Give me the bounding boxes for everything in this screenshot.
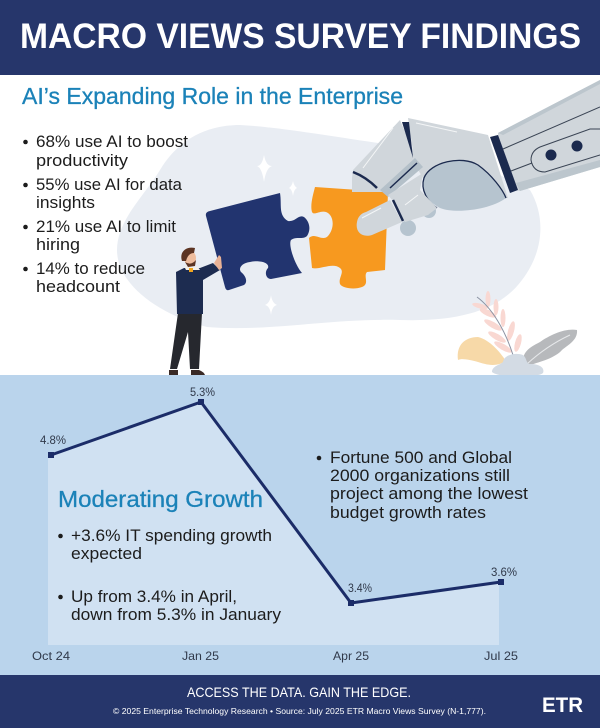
tagline: ACCESS THE DATA. GAIN THE EDGE.	[187, 684, 411, 700]
value labels: 4.8%	[40, 435, 66, 447]
growth bullets	[58, 526, 282, 624]
title banner: MACRO VIEWS SURVEY FINDINGS	[20, 17, 581, 56]
axis labels: Jan 25	[182, 649, 219, 663]
source line: © 2025 Enterprise Technology Research • Source: July 2025 ETR Macro Views Survey (N-1,777).	[113, 706, 486, 716]
shoes	[169, 370, 205, 375]
value labels: 5.3%	[190, 387, 215, 399]
shirt and tie	[184, 266, 200, 270]
pink fern	[472, 291, 523, 355]
hand	[214, 255, 222, 270]
panel: AI's expanding role	[22, 80, 600, 377]
bullet list: hiring	[36, 235, 80, 254]
fortune 500 bullet: Fortune 500 and Global	[330, 448, 512, 467]
face	[184, 251, 196, 265]
bullet list	[23, 132, 188, 296]
growth bullets: expected	[71, 544, 142, 563]
orange leaf	[458, 337, 506, 365]
fortune 500 bullet: budget growth rates	[330, 503, 486, 522]
heading: AI’s Expanding Role in the Enterprise	[22, 83, 403, 109]
panel: moderating growth	[0, 375, 600, 675]
icon: businessman	[169, 248, 222, 375]
trousers	[170, 313, 202, 369]
chart area	[48, 402, 499, 645]
mid finger strip	[380, 158, 423, 197]
icon: decorative plant	[458, 291, 577, 377]
bullet list: insights	[36, 193, 95, 212]
bullet list: 55% use AI for data	[36, 175, 183, 194]
bullet list: 68% use AI to boost	[36, 132, 188, 151]
bullet list: 21% use AI to limit	[36, 217, 176, 236]
heading: Moderating Growth	[58, 486, 263, 512]
icon: orange puzzle piece	[309, 187, 388, 288]
palm	[423, 160, 506, 211]
icon: sparkles	[257, 155, 297, 315]
upper finger	[352, 120, 416, 192]
mid finger segment	[388, 173, 437, 222]
axis labels: Apr 25	[333, 649, 369, 663]
bullet list: headcount	[36, 277, 120, 296]
trend line	[51, 402, 501, 603]
knuckles	[400, 220, 416, 236]
data markers	[48, 399, 504, 606]
logo: ETR	[542, 694, 583, 717]
value labels	[40, 387, 517, 595]
growth bullets: down from 5.3% in January	[71, 605, 282, 624]
jacket	[176, 263, 220, 314]
gray feather	[523, 330, 577, 365]
value labels: 3.4%	[348, 583, 372, 595]
axis labels: Oct 24	[32, 649, 70, 663]
rock	[492, 354, 543, 377]
axis labels	[32, 649, 518, 663]
bullet list: productivity	[36, 151, 129, 170]
title banner	[0, 0, 600, 75]
icon: navy puzzle piece	[206, 193, 309, 290]
fortune 500 bullet: project among the lowest	[330, 484, 528, 503]
growth bullets: +3.6% IT spending growth	[71, 526, 272, 545]
axis labels: Jul 25	[484, 649, 518, 663]
hair and beard	[181, 248, 196, 267]
footer	[0, 675, 600, 728]
illustration background blob	[117, 125, 540, 328]
fortune 500 bullet: 2000 organizations still	[330, 466, 510, 485]
growth bullets: Up from 3.4% in April,	[71, 587, 237, 606]
value labels: 3.6%	[491, 567, 517, 579]
fortune 500 bullet	[317, 448, 528, 522]
wrist band	[490, 135, 518, 193]
line chart	[32, 387, 518, 663]
back of hand	[408, 118, 508, 205]
icon: robot arm	[352, 80, 600, 236]
lower finger	[357, 200, 402, 236]
bullet list: 14% to reduce	[36, 259, 145, 278]
forearm	[498, 80, 600, 191]
